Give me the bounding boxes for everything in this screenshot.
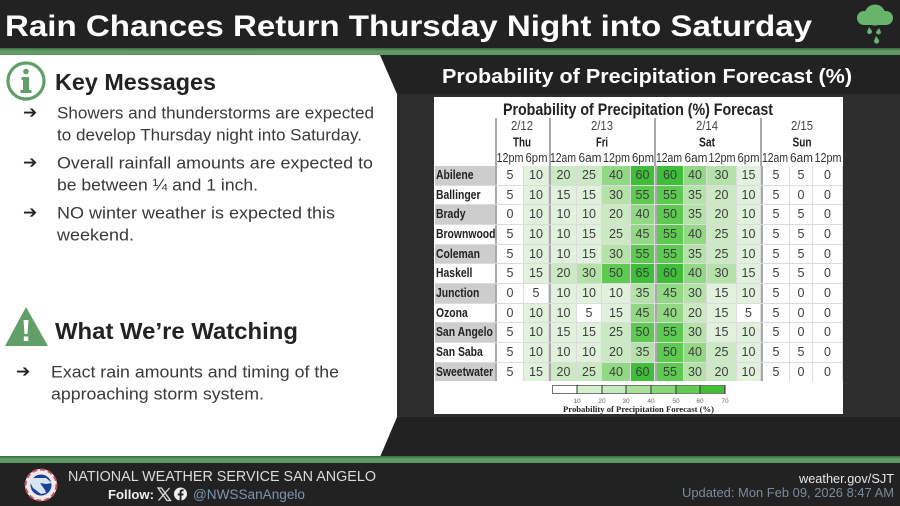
icon: Facebook (174, 488, 187, 500)
date labels (511, 119, 813, 133)
row: Brady (435, 205, 842, 224)
row: Junction: 45 (663, 286, 677, 300)
row: San Saba: 50 (663, 345, 677, 359)
row: Brady: 0 (824, 207, 831, 221)
row: San Angelo: 50 (636, 325, 649, 339)
row: San Angelo: 0 (824, 325, 831, 339)
row: San Saba: 10 (557, 345, 570, 359)
row: San Saba: 0 (824, 345, 831, 359)
row: Sweetwater: 55 (663, 365, 677, 379)
day labels: Sat (699, 134, 716, 150)
row: San Saba: San Saba (436, 344, 483, 359)
row: Sweetwater: 5 (507, 365, 513, 379)
row: San Angelo: San Angelo (436, 324, 493, 339)
row: Haskell (435, 264, 842, 283)
date labels: 2/12 (511, 119, 533, 133)
row: Junction: 0 (507, 286, 513, 300)
row: San Angelo: 55 (663, 325, 677, 339)
legend tick labels: 40 (647, 398, 655, 405)
time labels: 6pm (526, 151, 548, 165)
row: Brady: 10 (742, 207, 755, 221)
row: Ballinger: 10 (742, 188, 755, 202)
row: Ozona: 0 (824, 306, 831, 320)
footer follow line: @NWSSanAngelo (193, 487, 305, 502)
row: San Angelo (435, 323, 842, 342)
row: San Angelo: 25 (609, 325, 623, 339)
title: Rain Chances Return Thursday Night into Saturday (5, 10, 812, 43)
row: Abilene: 20 (557, 168, 570, 182)
footer agency name: NATIONAL WEATHER SERVICE SAN ANGELO (68, 469, 376, 485)
row: Brownwood (435, 225, 842, 244)
row: Coleman: 5 (507, 247, 513, 261)
row: Ballinger: 5 (507, 188, 513, 202)
row: Abilene: 40 (688, 168, 702, 182)
heading: key messages: Key Messages (55, 69, 216, 95)
row: Brownwood: 40 (688, 227, 702, 241)
row: Ozona: 15 (715, 306, 728, 320)
time labels: 6am (578, 151, 602, 165)
row: Haskell: 15 (742, 266, 755, 280)
row: Sweetwater: 25 (582, 365, 596, 379)
row: Ballinger: 55 (663, 188, 677, 202)
row: Brownwood: 10 (742, 227, 755, 241)
row: Coleman: 35 (688, 247, 702, 261)
row: Coleman: 55 (663, 247, 677, 261)
legend tick labels (573, 398, 729, 405)
heading: what we're watching: What We’re Watching (55, 318, 298, 344)
row: San Angelo: 15 (582, 325, 596, 339)
footer website: weather.gov/SJT (798, 471, 894, 486)
row: Coleman: 15 (582, 247, 596, 261)
time labels: 12pm (708, 151, 736, 165)
icon: warning triangle (5, 307, 48, 346)
row: Brownwood: 10 (529, 227, 543, 241)
row: Coleman: 55 (636, 247, 649, 261)
row: Abilene: 0 (824, 168, 831, 182)
row: Brady: 50 (663, 207, 677, 221)
time labels: 12pm (814, 151, 842, 165)
row: Junction: 5 (533, 286, 539, 300)
row: Coleman: 5 (798, 247, 804, 261)
row: Junction: 35 (636, 286, 649, 300)
row: Coleman: Coleman (436, 246, 480, 261)
legend (552, 385, 729, 414)
header bar (0, 0, 900, 49)
row: Haskell: 50 (609, 266, 623, 280)
row: Ballinger: 30 (609, 188, 623, 202)
day labels: Fri (596, 134, 608, 150)
bullet 3: ➔ (23, 203, 37, 223)
row: Sweetwater: Sweetwater (436, 364, 493, 379)
row: San Saba: 5 (507, 345, 513, 359)
bullet 1: Showers and thunderstorms are expected (57, 104, 374, 122)
time labels: 12pm (603, 151, 630, 165)
row: San Saba: 5 (798, 345, 804, 359)
row: Brownwood: 25 (715, 227, 728, 241)
row: Coleman: 10 (742, 247, 755, 261)
time labels: 6pm (738, 151, 760, 165)
row: Ozona: Ozona (436, 305, 468, 320)
row: Brady: 20 (609, 207, 623, 221)
row: Brady: 10 (557, 207, 570, 221)
row: Abilene: 15 (742, 168, 755, 182)
row: Brownwood: 15 (582, 227, 596, 241)
row: Haskell: 65 (636, 266, 649, 280)
row: San Angelo: 15 (557, 325, 570, 339)
row: Brownwood: 5 (798, 227, 804, 241)
row: San Angelo: 30 (688, 325, 702, 339)
row: Abilene: 5 (798, 168, 804, 182)
watching text: ➔ (16, 362, 30, 382)
row: Sweetwater: 0 (798, 365, 804, 379)
bullet 1: to develop Thursday night into Saturday. (57, 126, 362, 144)
row: Brady: 10 (582, 207, 596, 221)
row: Ballinger: 15 (582, 188, 596, 202)
bullet 2: ➔ (23, 153, 37, 173)
row: Brownwood: Brownwood (436, 226, 496, 241)
row: Ozona: 15 (609, 306, 623, 320)
row: Ballinger: 35 (688, 188, 702, 202)
time labels (496, 151, 842, 165)
row: Sweetwater: 10 (742, 365, 755, 379)
row: San Saba (435, 343, 842, 362)
row: Coleman: 10 (557, 247, 570, 261)
row: Ozona (435, 304, 842, 322)
row: Abilene: 10 (529, 168, 543, 182)
bullet 2 (23, 153, 373, 194)
row: San Saba: 10 (582, 345, 596, 359)
row: Haskell: 5 (773, 266, 779, 280)
row: Haskell: 0 (824, 266, 831, 280)
row: Abilene: 25 (582, 168, 596, 182)
row: Ballinger: 0 (798, 188, 804, 202)
row: Brownwood: 45 (636, 227, 649, 241)
time labels: 6am (790, 151, 813, 165)
icon: NWS seal (25, 469, 57, 501)
row: Haskell: 60 (663, 266, 677, 280)
row: Ballinger: Ballinger (436, 187, 480, 202)
time labels: 12pm (496, 151, 524, 165)
row: Junction: 10 (609, 286, 623, 300)
top green band (0, 48, 900, 55)
legend tick labels: 20 (598, 398, 606, 405)
row: San Saba: 10 (529, 345, 543, 359)
row: Junction (435, 284, 842, 303)
row: San Saba: 35 (636, 345, 649, 359)
row: Ballinger: 10 (529, 188, 543, 202)
legend title: Probability of Precipitation Forecast (%) (563, 404, 714, 414)
row: Haskell: 30 (715, 266, 728, 280)
row: Abilene: 5 (507, 168, 513, 182)
icon: information (8, 63, 44, 99)
row: Brownwood: 10 (557, 227, 570, 241)
row: San Saba: 20 (609, 345, 623, 359)
bullet 3 (23, 203, 335, 244)
watching text: approaching storm system. (51, 386, 264, 404)
legend tick labels: 70 (721, 398, 729, 405)
row: Ozona: 0 (507, 306, 513, 320)
bullet 2: Overall rainfall amounts are expected to (57, 154, 373, 172)
footer follow line: Follow: (108, 487, 154, 502)
row: Junction: 10 (582, 286, 596, 300)
row: Brady: 10 (529, 207, 543, 221)
time labels: 6am (684, 151, 708, 165)
row: Abilene: 60 (663, 168, 677, 182)
time labels: 12am (550, 151, 576, 165)
row: Sweetwater (435, 363, 842, 381)
row: Ballinger (435, 186, 842, 204)
row: Abilene (435, 166, 842, 185)
row: Brady: 5 (773, 207, 779, 221)
row: Abilene: Abilene (436, 167, 474, 182)
time labels: 6pm (632, 151, 654, 165)
row: Ozona: 5 (773, 306, 779, 320)
row: Junction: 5 (773, 286, 779, 300)
row: Ballinger: 5 (773, 188, 779, 202)
row: Ozona: 5 (745, 306, 752, 320)
row: Sweetwater: 20 (715, 365, 728, 379)
row: San Angelo: 10 (529, 325, 543, 339)
bullet 2: be between ¼ and 1 inch. (57, 176, 258, 194)
row: Sweetwater: 0 (824, 365, 831, 379)
row: Ozona: 40 (663, 306, 677, 320)
row: Brady: 5 (798, 207, 804, 221)
heading: forecast panel: Probability of Precipitation Forecast (%) (442, 65, 852, 88)
row: Sweetwater: 60 (636, 365, 649, 379)
date labels: 2/14 (696, 119, 718, 133)
table title: Probability of Precipitation (%) Forecast (503, 100, 773, 119)
row: Brady: 35 (688, 207, 702, 221)
row: Ozona: 10 (529, 306, 543, 320)
row: Brady: 20 (715, 207, 728, 221)
row: Haskell: 15 (529, 266, 543, 280)
row: Ballinger: 55 (636, 188, 649, 202)
row: Abilene: 5 (773, 168, 779, 182)
row: San Saba: 10 (742, 345, 755, 359)
row: Sweetwater: 40 (609, 365, 623, 379)
time labels: 12am (762, 151, 788, 165)
row: Junction: 10 (742, 286, 755, 300)
watching text: Exact rain amounts and timing of the (51, 364, 339, 382)
row: Ozona: 45 (636, 306, 649, 320)
row: Coleman: 5 (773, 247, 779, 261)
row: Brownwood: 0 (824, 227, 831, 241)
row: Junction: 15 (715, 286, 728, 300)
row: San Angelo: 15 (715, 325, 728, 339)
row: Junction: Junction (436, 285, 479, 300)
row: Junction: 10 (557, 286, 570, 300)
watching text (16, 362, 339, 404)
row: Junction: 0 (798, 286, 804, 300)
legend tick labels: 10 (573, 398, 581, 405)
row: Sweetwater: 15 (529, 365, 543, 379)
row: Brownwood: 5 (507, 227, 513, 241)
bullet 3: NO winter weather is expected this (57, 204, 335, 222)
row: San Angelo: 0 (798, 325, 804, 339)
row: San Saba: 5 (773, 345, 779, 359)
row: Ozona: 10 (557, 306, 570, 320)
footer updated time: Updated: Mon Feb 09, 2026 8:47 AM (682, 485, 894, 500)
row: Sweetwater: 30 (688, 365, 702, 379)
day labels (513, 134, 812, 150)
row: Brady: 40 (636, 207, 649, 221)
row: Brady: Brady (436, 206, 465, 221)
precipitation probability table (435, 166, 843, 381)
bullet 1 (23, 103, 374, 144)
right panel backdrop (397, 94, 900, 417)
row: Ozona: 5 (586, 306, 592, 320)
row: Ozona: 20 (688, 306, 702, 320)
row: Haskell: 5 (798, 266, 804, 280)
row: Junction: 0 (824, 286, 831, 300)
bullet 1: ➔ (23, 103, 37, 123)
day labels: Sun (792, 134, 812, 150)
row: Abilene: 60 (636, 168, 649, 182)
row: Abilene: 40 (609, 168, 623, 182)
row: Haskell: 5 (507, 266, 513, 280)
row: Junction: 30 (688, 286, 702, 300)
row: San Angelo: 5 (773, 325, 779, 339)
bottom green band (0, 456, 900, 463)
row: Coleman: 25 (715, 247, 728, 261)
row: Sweetwater: 5 (773, 365, 779, 379)
footer bar (0, 463, 900, 506)
row: Brownwood: 25 (609, 227, 623, 241)
key messages list (23, 103, 374, 244)
legend tick labels: 50 (672, 398, 680, 405)
time labels: 12am (656, 151, 682, 165)
row: San Angelo: 5 (507, 325, 513, 339)
row: San Angelo: 10 (742, 325, 755, 339)
row: Ballinger: 0 (824, 188, 831, 202)
bullet 3: weekend. (56, 226, 134, 244)
legend colour bar (552, 385, 725, 394)
footer follow line (108, 487, 305, 502)
row: Brownwood: 55 (663, 227, 677, 241)
row: Haskell: 30 (582, 266, 596, 280)
legend tick labels: 60 (696, 398, 704, 405)
row: Haskell: Haskell (436, 265, 472, 280)
icon: X (158, 488, 170, 500)
panel: key messages and watching (0, 55, 397, 457)
date labels: 2/15 (791, 119, 813, 133)
row: Coleman (435, 245, 842, 263)
row: Brady: 0 (507, 207, 513, 221)
row: Coleman: 10 (529, 247, 543, 261)
legend tick labels: 30 (622, 398, 630, 405)
row: Coleman: 0 (824, 247, 831, 261)
row: Haskell: 20 (557, 266, 570, 280)
table header (496, 119, 842, 165)
row: Abilene: 30 (715, 168, 728, 182)
row: Coleman: 30 (609, 247, 623, 261)
row: Ballinger: 15 (557, 188, 570, 202)
row: Ozona: 0 (798, 306, 804, 320)
day labels: Thu (513, 134, 531, 150)
forecast image card (434, 97, 843, 414)
row: Haskell: 40 (688, 266, 702, 280)
row: Sweetwater: 20 (557, 365, 570, 379)
date labels: 2/13 (591, 119, 613, 133)
row: San Saba: 25 (715, 345, 728, 359)
row: Ballinger: 20 (715, 188, 728, 202)
row: San Saba: 40 (688, 345, 702, 359)
icon: rain cloud (857, 4, 893, 44)
row: Brownwood: 5 (773, 227, 779, 241)
